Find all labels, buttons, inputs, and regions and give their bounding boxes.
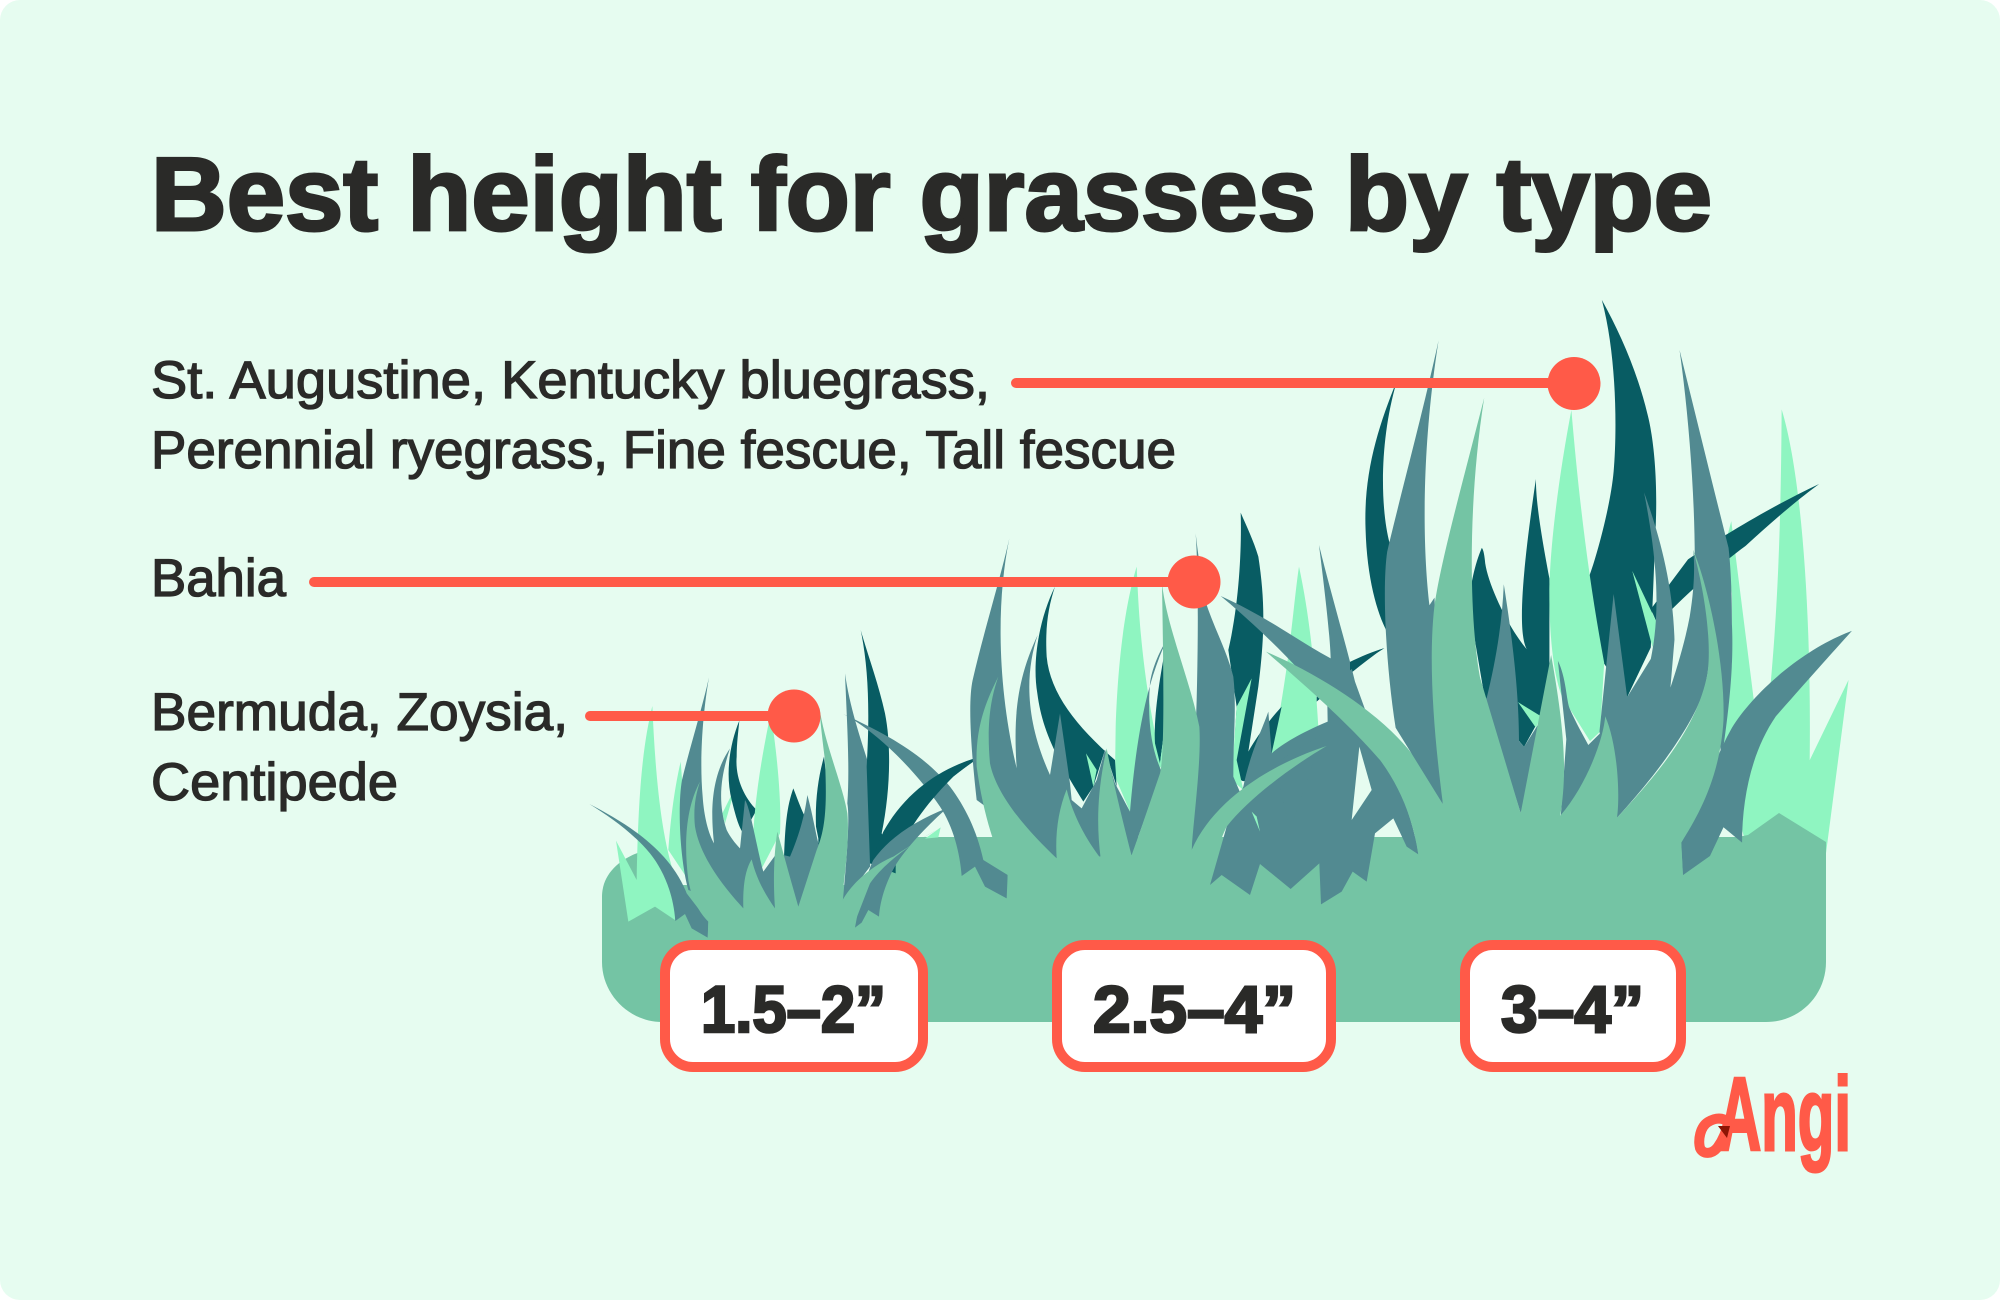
leader line: tall grass: [1016, 357, 1600, 410]
clump: medium grass: [950, 513, 1443, 933]
height badge: 3–4 inches: [1465, 945, 1681, 1067]
label: tall grass varieties: [151, 351, 1176, 480]
label: short grass varieties: Centipede: [151, 753, 398, 812]
leader line: Bahia: [314, 556, 1220, 608]
label: Bahia: Bahia: [151, 549, 287, 608]
height badge: 1.5–2 inches: 1.5–2”: [701, 972, 886, 1046]
back mint blades, right clump: [1722, 409, 1849, 854]
grass illustration: [589, 300, 1852, 1022]
logo: Angi: [1699, 1057, 1851, 1173]
height badge: 3–4 inches: 3–4”: [1501, 972, 1644, 1046]
height badge: 2.5–4 inches: 2.5–4”: [1093, 972, 1296, 1046]
height badge: 1.5–2 inches: [665, 945, 923, 1067]
label: tall grass varieties: Perennial ryegrass, Fine fescue, Tall fescue: [151, 421, 1176, 480]
title: Best height for grasses by type: [151, 137, 1712, 253]
label: tall grass varieties: St. Augustine, Kentucky bluegrass,: [151, 351, 990, 410]
clump: tall grass: [1350, 300, 1852, 875]
label: short grass varieties: [151, 683, 568, 812]
height badge: 2.5–4 inches: [1057, 945, 1331, 1067]
clump: short grass: [589, 630, 1008, 943]
ground: [602, 813, 1826, 1022]
leader line: short grass: [590, 690, 820, 742]
label: short grass varieties: Bermuda, Zoysia,: [151, 683, 568, 742]
logo: Angi: Angi: [1718, 1057, 1851, 1173]
